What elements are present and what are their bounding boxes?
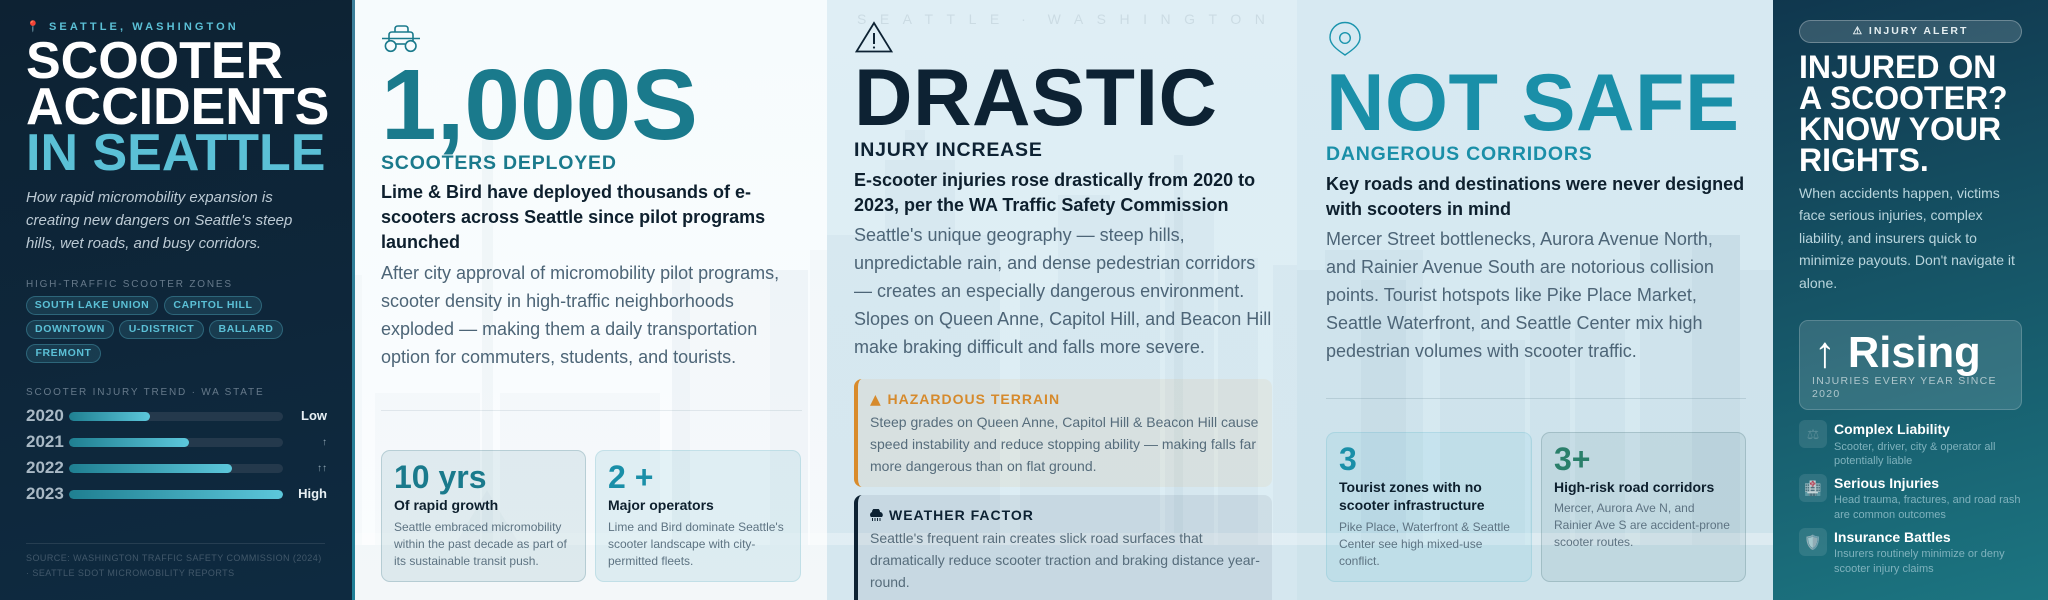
zone tags: FREMONT [35, 347, 92, 359]
item heading: Complex Liability [1834, 421, 1950, 437]
body text: unpredictable rain, and dense pedestrian corridors [854, 252, 1255, 272]
body text: minimize payouts. Don't navigate it [1799, 252, 2015, 268]
location eyebrow: 📍 SEATTLE, WASHINGTON [26, 21, 239, 33]
stat box: rising [1799, 320, 2022, 410]
item heading: Serious Injuries [1834, 475, 1939, 491]
body text: scooter density in high-traffic neighborhoods [381, 291, 734, 311]
zone tags: SOUTH LAKE UNION [35, 299, 149, 311]
stat value: 3+ [1554, 441, 1590, 477]
stat description: scooter routes. [1554, 535, 1633, 549]
callout: hazardous terrain [854, 379, 1272, 487]
body text: — creates an especially dangerous environment. [854, 280, 1244, 300]
body text [1326, 228, 1714, 361]
subtitle: How rapid micromobility expansion is [26, 189, 273, 206]
item description: potentially liable [1834, 455, 1912, 467]
source note: · SEATTLE SDOT MICROMOBILITY REPORTS [26, 568, 235, 578]
bar chart: injury trend: ↑ [322, 437, 327, 448]
body text: Slopes on Queen Anne, Capitol Hill, and Beacon Hill [854, 308, 1271, 328]
body text: points. Tourist hotspots like Pike Place Market, [1326, 284, 1697, 304]
stat label: Of rapid growth [394, 497, 498, 513]
subheading: SCOOTERS DEPLOYED [381, 152, 617, 174]
stat description: conflict. [1339, 554, 1380, 568]
zone tags: U-DISTRICT [129, 323, 194, 335]
lead text [854, 170, 1255, 215]
icon: scales: ⚖ [1807, 426, 1819, 442]
alert badge [1799, 20, 2022, 43]
alert badge: ⚠ INJURY ALERT [1853, 25, 1968, 37]
zone tags: BALLARD [219, 323, 273, 335]
callout text [870, 414, 1258, 474]
stat description [1554, 501, 1730, 549]
list item: serious injuries [1799, 474, 2020, 521]
bar chart: injury trend: High [298, 486, 327, 501]
body text: option for commuters, students, and tourists. [381, 347, 736, 367]
body text: After city approval of micromobility pilot programs, [381, 263, 779, 283]
item description: Insurers routinely minimize or deny [1834, 548, 2005, 560]
panel: know your rights [1799, 20, 2022, 575]
bar chart: injury trend: ↑↑ [317, 463, 327, 474]
big word: not safe: NOT SAFE [1326, 58, 1740, 148]
stat description: Lime and Bird dominate Seattle's [608, 520, 784, 534]
stat value: 2 + [608, 459, 653, 495]
zone tags [26, 296, 283, 363]
stat card: 2+ [595, 450, 801, 582]
body text: and Rainier Avenue South are notorious collision [1326, 256, 1714, 276]
subheading: INJURY INCREASE [854, 139, 1043, 161]
heading: RIGHTS. [1799, 142, 1929, 178]
heading: A SCOOTER? [1799, 80, 2008, 116]
panel: scooters deployed [381, 25, 802, 582]
icon: hospital [1799, 474, 1827, 502]
bar chart: injury trend: 2022 [26, 458, 64, 477]
lead text: E-scooter injuries rose drastically from 2020 to [854, 170, 1255, 190]
body text: When accidents happen, victims [1799, 184, 2000, 200]
title: IN SEATTLE [26, 124, 325, 182]
panel: drastic injury increase [854, 11, 1278, 600]
body text: Seattle's unique geography — steep hills, [854, 224, 1185, 244]
list item: complex liability [1799, 420, 1995, 467]
icon: scales [1799, 420, 1827, 448]
stat description: Rainier Ave S are accident-prone [1554, 518, 1730, 532]
item description: scooter injury claims [1834, 563, 1934, 575]
subtitle [26, 189, 292, 252]
watermark: SEATTLE · WASHINGTON [857, 11, 1278, 27]
stat description: permitted fleets. [608, 554, 693, 568]
callout heading: WEATHER FACTOR [889, 507, 1034, 523]
title: ACCIDENTS [26, 78, 329, 136]
stat label: Major operators [608, 497, 714, 513]
item heading: Insurance Battles [1834, 529, 1951, 545]
source note: SOURCE: WASHINGTON TRAFFIC SAFETY COMMISSION (2024) [26, 553, 322, 563]
body text: pedestrian volumes with scooter traffic. [1326, 340, 1637, 360]
stat label [1339, 479, 1484, 513]
bar chart: injury trend: 2023 [26, 484, 64, 503]
bar chart: injury trend: 2020 [26, 406, 64, 425]
stat value: ↑ Rising [1814, 329, 1981, 377]
callout text: round. [870, 574, 910, 590]
stat description: Pike Place, Waterfront & Seattle [1339, 520, 1510, 534]
bar chart: injury trend [26, 406, 327, 503]
item description: Scooter, driver, city & operator all [1834, 440, 1995, 452]
stat description [608, 520, 784, 568]
stat description: Center see high mixed-use [1339, 537, 1482, 551]
lead text [1326, 174, 1744, 219]
stat caption: INJURIES EVERY YEAR SINCE [1812, 375, 1997, 387]
body text: Mercer Street bottlenecks, Aurora Avenue North, [1326, 228, 1713, 248]
callout text [870, 530, 1260, 590]
callout text: speed instability and reduce stopping ability — making falls far [870, 436, 1256, 452]
lead text: scooters across Seattle since pilot programs [381, 207, 765, 227]
stat label: Tourist zones with no [1339, 479, 1482, 495]
lead text [381, 182, 765, 252]
heading: KNOW YOUR [1799, 110, 2001, 146]
item description [1834, 440, 1995, 467]
callout heading: ▲ [870, 392, 881, 408]
zone tags: CAPITOL HILL [173, 299, 253, 311]
item description [1834, 548, 2005, 575]
icon: shield: 🛡️ [1804, 534, 1822, 550]
body text [854, 224, 1271, 357]
item description: are common outcomes [1834, 509, 1946, 521]
stat caption: 2020 [1812, 388, 1841, 400]
stat description [1339, 520, 1510, 568]
stat description: within the past decade as part of [394, 537, 567, 551]
panel: not safe corridors [1326, 22, 1746, 582]
stat description: scooter landscape with city- [608, 537, 755, 551]
body text: face serious injuries, complex [1799, 207, 1983, 223]
zones heading: HIGH-TRAFFIC SCOOTER ZONES [26, 279, 233, 290]
trend heading: SCOOTER INJURY TREND · WA STATE [26, 387, 264, 398]
panel: intro sidebar [26, 20, 329, 578]
callout text: Seattle's frequent rain creates slick road surfaces that [870, 530, 1203, 546]
heading [1799, 48, 2008, 178]
list item: insurance battles [1799, 528, 2005, 575]
item description: Head trauma, fractures, and road rash [1834, 494, 2020, 506]
lead text: with scooters in mind [1326, 199, 1511, 219]
stat description: Seattle embraced micromobility [394, 520, 561, 534]
stat value: 10 yrs [394, 459, 487, 495]
stat card: 3+ corridors [1541, 432, 1746, 582]
callout text: Steep grades on Queen Anne, Capitol Hill & Beacon Hill cause [870, 414, 1258, 430]
body text [381, 263, 779, 367]
stat card: 10 yrs [381, 450, 586, 582]
bar chart: injury trend: 2021 [26, 432, 64, 451]
lead text: Key roads and destinations were never designed [1326, 174, 1744, 194]
title: SCOOTER [26, 32, 283, 90]
callout text: more dangerous than on flat ground. [870, 458, 1096, 474]
callout: weather factor [854, 495, 1272, 600]
body text: make braking difficult and falls more severe. [854, 336, 1205, 356]
body text: liability, and insurers quick to [1799, 230, 1977, 246]
zone tags: DOWNTOWN [35, 323, 105, 335]
subtitle: hills, wet roads, and busy corridors. [26, 235, 261, 252]
body text: alone. [1799, 274, 1837, 290]
subheading: DANGEROUS CORRIDORS [1326, 143, 1593, 165]
body text [1799, 184, 2015, 290]
stat card: 3 tourist zones [1326, 432, 1532, 582]
icon: rain cloud [870, 509, 883, 521]
stat description [394, 520, 567, 568]
body text: Seattle Waterfront, and Seattle Center mix high [1326, 312, 1703, 332]
icon: hospital: 🏥 [1804, 480, 1822, 496]
bar chart: injury trend: Low [301, 408, 327, 423]
stat value: 3 [1339, 441, 1357, 477]
lead text: 2023, per the WA Traffic Safety Commission [854, 195, 1228, 215]
big word: drastic: DRASTIC [854, 53, 1218, 143]
title [26, 32, 329, 182]
lead text: launched [381, 232, 460, 252]
body text: exploded — making them a daily transportation [381, 319, 757, 339]
stat caption [1812, 375, 1997, 400]
icon: scooter [382, 25, 420, 52]
source note [26, 553, 322, 578]
subtitle: creating new dangers on Seattle's steep [26, 212, 292, 229]
icon: warning triangle [855, 21, 893, 52]
callout heading: HAZARDOUS TERRAIN [888, 391, 1060, 407]
heading: INJURED ON [1799, 48, 1996, 84]
stat description: Mercer, Aurora Ave N, and [1554, 501, 1695, 515]
callout text: dramatically reduce scooter traction and braking distance year- [870, 552, 1260, 568]
stat description: its sustainable transit push. [394, 554, 539, 568]
icon: shield [1799, 528, 1827, 556]
stat label: High-risk road corridors [1554, 479, 1714, 495]
stat label: scooter infrastructure [1339, 497, 1484, 513]
icon: location pin [1329, 22, 1361, 56]
big number: 1,000s: 1,000S [381, 49, 698, 161]
lead text: Lime & Bird have deployed thousands of e- [381, 182, 751, 202]
item description [1834, 494, 2020, 521]
